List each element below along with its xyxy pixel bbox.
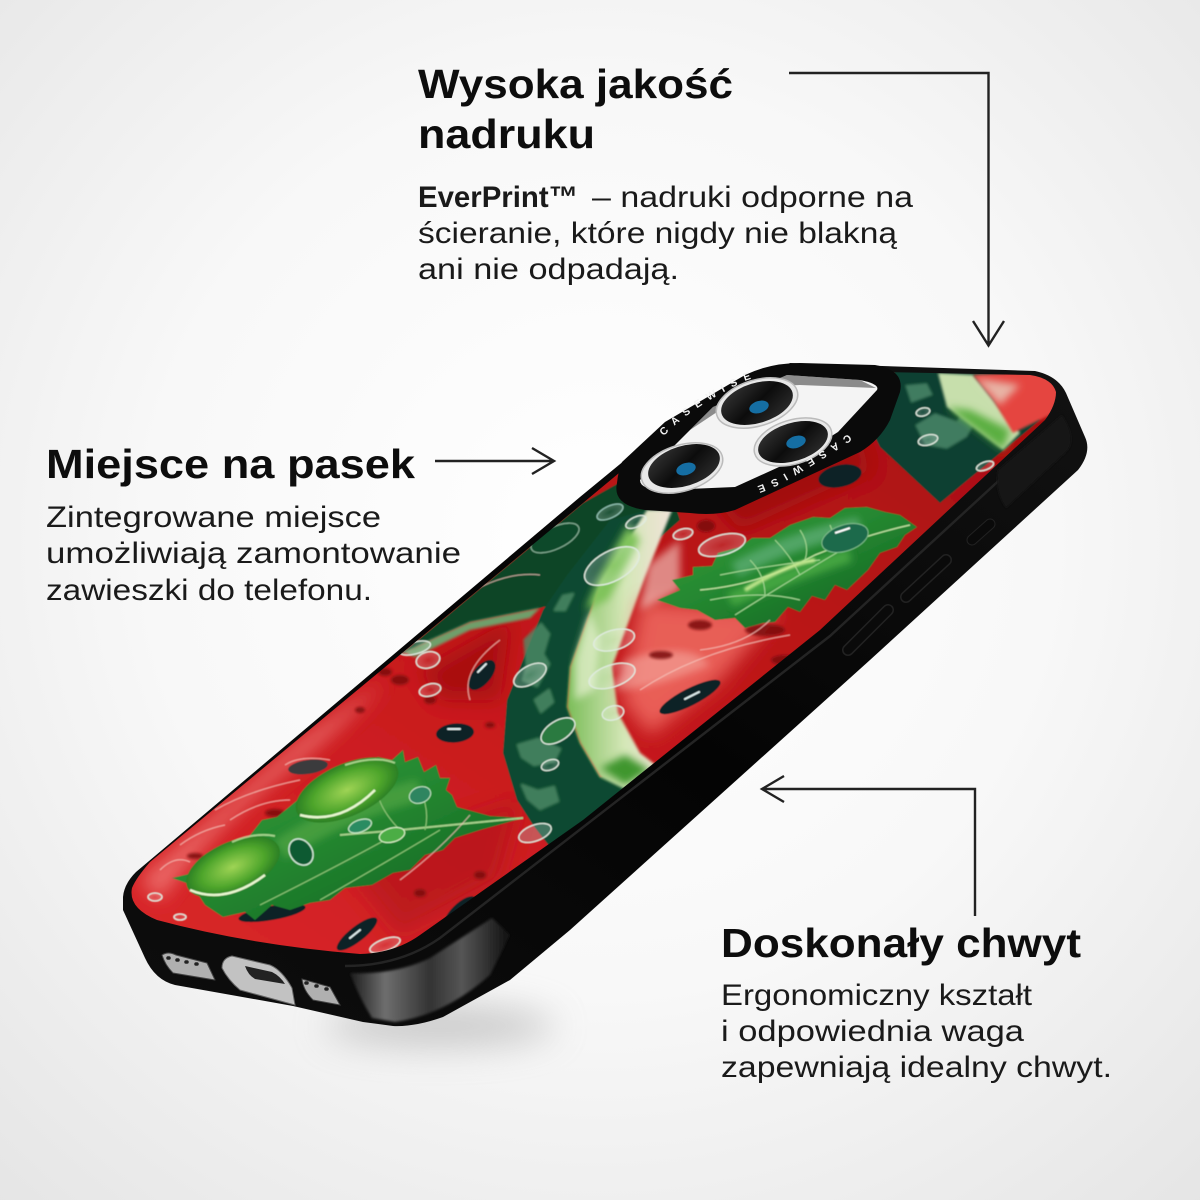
phone shadow [325, 1006, 555, 1046]
callout: print quality [418, 61, 913, 286]
red flesh base [132, 372, 1050, 954]
callout: strap slot [46, 441, 461, 607]
thin light strip [403, 608, 540, 657]
leaf droplet upper [296, 756, 398, 823]
body text: zawieszki do telefonu. [46, 574, 372, 607]
charging port [222, 956, 295, 1005]
upper right light rind [938, 373, 1020, 450]
side button: volume up [906, 560, 946, 597]
body text [46, 501, 461, 607]
upper dark green rind [402, 483, 680, 654]
glossy bottom corner [350, 918, 510, 1022]
camera island [616, 363, 901, 514]
brand ring bottom: CASEWISE [758, 435, 851, 493]
body text: ani nie odpadają. [418, 253, 679, 286]
phone in watermelon case [123, 363, 1088, 1026]
seeds [237, 461, 864, 955]
body text [721, 979, 1112, 1084]
central dark green rind [503, 510, 647, 860]
lens right [748, 409, 838, 475]
camera glass plate [640, 375, 877, 490]
body text [418, 181, 913, 286]
body text: zapewniają idealny chwyt. [721, 1051, 1112, 1084]
lens left [635, 434, 729, 502]
arrow: grip [762, 776, 975, 916]
upper leaf [657, 507, 917, 628]
lower leaf [172, 744, 523, 920]
watermelon artwork [132, 372, 1056, 954]
middle pink flesh [622, 600, 780, 735]
body text: – nadruki odporne na [592, 181, 913, 214]
rind mottling [515, 591, 576, 812]
water droplets [148, 406, 995, 956]
leaf droplet lower [186, 833, 280, 898]
light rind band [567, 510, 672, 790]
callout: grip [721, 920, 1112, 1084]
side button: action [972, 524, 990, 540]
brand ring top: CASEWISE [660, 372, 751, 434]
heading: Miejsce na pasek [46, 441, 415, 487]
right speaker grille [302, 979, 340, 1005]
side button: volume down [848, 610, 888, 650]
case body [123, 363, 1087, 1026]
arrow: print quality [789, 73, 1004, 346]
lens top [710, 369, 804, 437]
lower left pink flesh [140, 680, 385, 900]
heading line 2: nadruku [418, 111, 595, 157]
upper right red flesh [973, 370, 1060, 433]
left speaker grille [162, 953, 215, 980]
body text: Zintegrowane miejsce [46, 501, 381, 534]
heading: Doskonały chwyt [721, 920, 1081, 966]
flesh pits [187, 520, 799, 897]
body text: EverPrint™ [418, 181, 578, 214]
side button: camera control [997, 415, 1071, 508]
body text: ścieranie, które nigdy nie blakną [418, 217, 897, 250]
case inner rim highlight [345, 428, 1056, 966]
flesh ripple highlights [160, 574, 790, 880]
body text: Ergonomiczny kształt [721, 979, 1033, 1012]
heading: Wysoka jakość [418, 61, 733, 107]
body text: umożliwiają zamontowanie [46, 537, 461, 570]
body text: i odpowiednia waga [721, 1015, 1024, 1048]
upper right dark rind [873, 368, 1040, 503]
arrow: strap slot [435, 448, 554, 474]
